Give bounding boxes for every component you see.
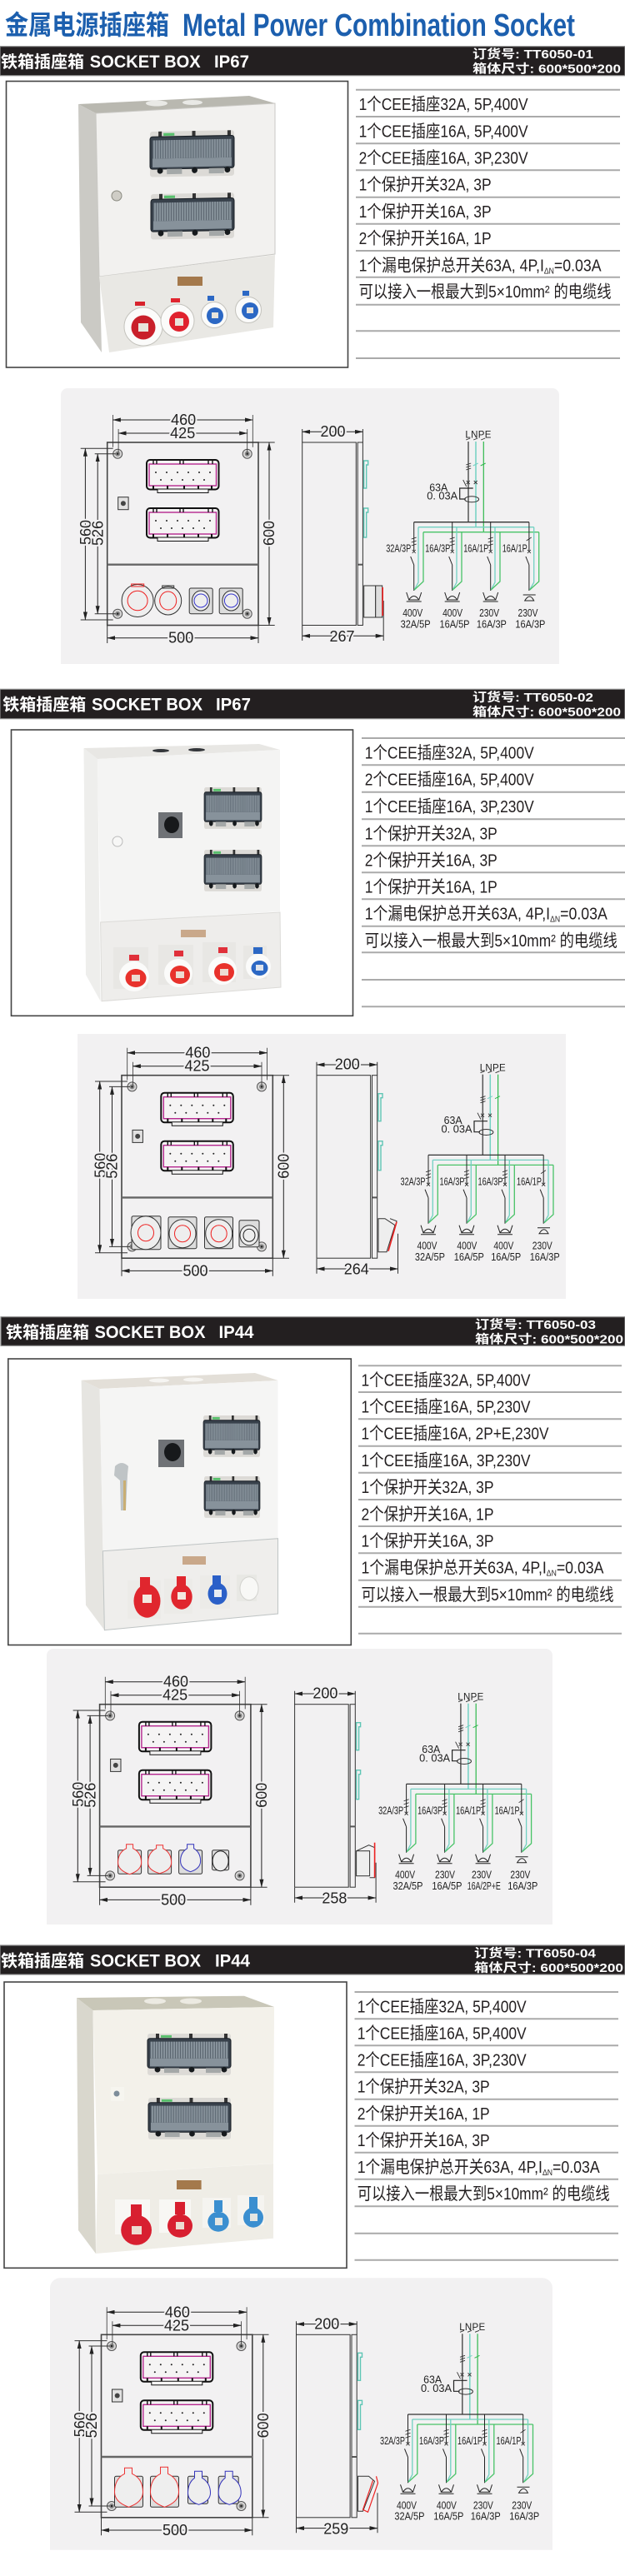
chart: section 2 dimension and wiring drawing: 16A/3P [530,1251,560,1263]
chart: section 4 dimension and wiring drawing: 16A/1P [497,2434,522,2447]
panel: section 1 specification list: 1个保护开关16A, 3P [359,202,492,222]
chart: section 1 dimension and wiring drawing: 16A/5P [439,617,469,630]
chart: section 1 dimension and wiring drawing: 16A/1P [463,542,488,555]
title: 金属电源插座箱 [5,10,169,40]
chart: section 2 dimension and wiring drawing: 230V [532,1240,552,1252]
chart: section 4 dimension and wiring drawing: 0. 03A [421,2382,452,2394]
chart: section 1 dimension and wiring drawing: 267 [329,628,355,645]
chart: section 4 dimension and wiring drawing: 500 [162,2522,188,2539]
panel: section 4 header bar: IP44 [215,1951,250,1970]
panel: section 4 specification list: 1个漏电保护总开关63A, 4P,I [358,2158,572,2177]
panel: section 2 product photo [12,730,353,1016]
panel: section 4 specification list: 2个保护开关16A, 1P [358,2104,490,2124]
chart: section 1 dimension and wiring drawing: 230V [518,607,538,619]
panel: section 4 specification list: 2个CEE插座16A, 3P,230V [358,2051,527,2070]
chart: section 3 dimension and wiring drawing: 400V [395,1869,415,1881]
chart: section 1 dimension and wiring drawing: 0. 03A [427,490,458,502]
panel: section 2 specification list: =0.03A [560,905,608,924]
chart: section 2 dimension and wiring drawing: 200 [335,1056,360,1073]
chart: section 2 dimension and wiring drawing: 16A/5P [491,1251,521,1263]
chart: section 1 dimension and wiring drawing: 460 [171,412,196,428]
chart: section 3 dimension and wiring drawing: 258 [322,1890,347,1907]
panel: section 2 specification list: 2个CEE插座16A, 5P,400V [365,771,534,790]
chart: section 1 dimension and wiring drawing: 400V [402,607,422,619]
panel: section 2 header bar: 铁箱插座箱 [2,695,86,715]
panel: section 1 drawing background [61,388,559,664]
chart: section 4 dimension and wiring drawing: 526 [83,2413,100,2438]
panel: section 4 specification list: 1个保护开关32A, 3P [358,2078,490,2097]
chart: section 3 dimension and wiring drawing: 16A/1P [495,1804,520,1816]
chart: section 4 dimension and wiring drawing: 400V [437,2499,457,2511]
panel: section 3 specification list: 2个保护开关16A, 1P [362,1505,493,1524]
panel: section 4 header bar [0,1945,625,1975]
chart: section 4 dimension and wiring drawing: 600 [255,2413,272,2438]
chart: section 3 dimension and wiring drawing: 16A/3P [508,1880,538,1892]
chart: section 2 dimension and wiring drawing: 264 [344,1261,369,1278]
chart: section 3 dimension and wiring drawing: 600 [253,1783,270,1808]
chart: section 1 dimension and wiring drawing: 526 [89,521,106,546]
panel: section 3 specification list: ΔN [547,1570,557,1579]
panel: section 4 specification list: 1个保护开关16A, 3P [358,2131,490,2150]
chart: section 1 dimension and wiring drawing: 32A/3P [386,542,411,555]
panel: section 1 specification list: 1个CEE插座32A, 5P,400V [359,95,528,114]
chart: section 1 dimension and wiring drawing [78,412,545,646]
chart: section 4 dimension and wiring drawing: 16A/1P [458,2434,482,2447]
panel: section 1 specification list: ΔN [544,267,554,276]
chart: section 3 dimension and wiring drawing: 16A/1P [456,1804,481,1816]
chart: section 3 dimension and wiring drawing [70,1674,538,1908]
panel: section 4 specification list [355,1992,618,2260]
panel: section 3 header bar: 铁箱插座箱 [6,1322,89,1342]
panel: section 4 specification list: 1个CEE插座16A, 5P,400V [358,2024,527,2044]
panel: section 1 header bar: SOCKET BOX [90,52,201,72]
panel: section 3 specification list: 1个CEE插座16A, 3P,230V [362,1451,531,1470]
panel: section 2 specification list: 1个CEE插座16A, 3P,230V [365,797,534,816]
chart: section 2 dimension and wiring drawing: 500 [182,1262,208,1279]
chart: section 4 dimension and wiring drawing: 230V [473,2499,493,2511]
chart: section 1 dimension and wiring drawing: 400V [442,607,462,619]
chart: section 3 dimension and wiring drawing: 560 [70,1782,87,1807]
panel: section 3 header bar [1,1317,625,1346]
panel: section 1 header bar: IP67 [214,52,249,72]
panel: section 3 specification list [358,1365,622,1634]
chart: section 3 dimension and wiring drawing: 63A [422,1743,441,1755]
panel: section 1 specification list: 2个保护开关16A, 1P [359,229,492,248]
panel: section 2 specification list: 1个CEE插座32A, 5P,400V [365,743,534,762]
chart: section 4 dimension and wiring drawing: 200 [314,2315,339,2332]
chart: section 2 dimension and wiring drawing: 16A/5P [454,1251,484,1263]
chart: section 3 dimension and wiring drawing: 16A/5P [432,1880,462,1892]
panel: section 2 specification list [362,738,625,1006]
chart: section 4 dimension and wiring drawing: 230V [512,2499,532,2511]
chart: section 4 dimension and wiring drawing [72,2304,539,2539]
panel: section 2 specification list: ΔN [550,916,560,925]
panel: section 1 specification list: 1个保护开关32A, 3P [359,176,492,195]
panel: section 1 specification list [356,90,620,358]
chart: section 1 dimension and wiring drawing: 200 [320,423,346,440]
title [5,8,575,43]
chart: section 1 dimension and wiring drawing: 63A [429,481,448,493]
chart: section 3 dimension and wiring drawing: 200 [312,1685,338,1702]
chart: section 2 dimension and wiring drawing: 526 [104,1154,121,1179]
panel: section 3 header bar: 箱体尺寸: 600*500*200 [475,1331,623,1346]
chart: section 2 dimension and wiring drawing: 560 [92,1153,108,1178]
panel: section 2 specification list: 1个保护开关32A, 3P [365,825,498,844]
chart: section 1 dimension and wiring drawing: 500 [168,630,193,646]
chart: section 2 dimension and wiring drawing: 460 [185,1045,210,1061]
chart: section 2 dimension and wiring drawing: 0. 03A [442,1122,472,1135]
panel: section 3 specification list: 1个保护开关32A, 3P [362,1478,493,1497]
chart: section 2 dimension and wiring drawing: 32A/5P [415,1251,445,1263]
panel: section 4 specification list: ΔN [542,2169,552,2178]
panel: section 2 drawing background [78,1034,566,1299]
chart: section 2 dimension and wiring drawing: 32A/3P [400,1175,425,1187]
panel: section 4 product photo [4,1982,347,2268]
panel: section 4 header bar: SOCKET BOX [90,1951,201,1970]
panel: section 4 header bar: 订货号: TT6050-04 [474,1946,596,1961]
chart: section 1 dimension and wiring drawing: 16A/3P [425,542,450,555]
panel: section 1 header bar: 订货号: TT6050-01 [472,47,593,62]
chart: section 1 dimension and wiring drawing: 230V [479,607,499,619]
chart: section 3 dimension and wiring drawing: 425 [162,1687,188,1704]
panel: section 1 header bar [0,47,625,77]
chart: section 4 dimension and wiring drawing: 400V [397,2499,417,2511]
panel: section 3 specification list: 1个CEE插座16A, 2P+E,230V [362,1425,549,1444]
panel: section 2 header bar: SOCKET BOX [92,696,202,715]
chart: section 4 dimension and wiring drawing: 460 [165,2304,190,2320]
chart: section 2 dimension and wiring drawing [92,1045,560,1279]
chart: section 4 dimension and wiring drawing: 16A/5P [433,2510,463,2523]
chart: section 4 dimension and wiring drawing: 32A/3P [380,2434,405,2447]
chart: section 3 dimension and wiring drawing: LNPE [458,1692,484,1702]
panel: section 3 header bar: SOCKET BOX [95,1323,205,1342]
chart: section 3 dimension and wiring drawing: 32A/5P [392,1880,422,1892]
chart: section 1 dimension and wiring drawing: 600 [261,521,278,546]
panel: section 3 product photo [8,1359,351,1645]
panel: section 4 header bar: 箱体尺寸: 600*500*200 [474,1960,623,1975]
chart: section 4 dimension and wiring drawing: 16A/3P [419,2434,444,2447]
chart: section 1 dimension and wiring drawing: 16A/1P [502,542,528,555]
chart: section 3 dimension and wiring drawing: 16A/3P [418,1804,442,1816]
chart: section 2 dimension and wiring drawing: 400V [493,1240,514,1252]
chart: section 3 dimension and wiring drawing: 460 [163,1674,188,1690]
chart: section 1 dimension and wiring drawing: LNPE [465,431,492,441]
panel: section 2 header bar: 箱体尺寸: 600*500*200 [472,705,621,720]
chart: section 4 dimension and wiring drawing: 63A [423,2374,442,2386]
chart: section 3 dimension and wiring drawing: 0. 03A [419,1751,450,1764]
chart: section 1 dimension and wiring drawing: 16A/3P [477,617,507,630]
panel: section 4 specification list: =0.03A [552,2158,600,2177]
panel: section 1 product photo [7,82,348,367]
chart: section 4 dimension and wiring drawing: 259 [323,2520,348,2537]
chart: section 3 dimension and wiring drawing: 16A/2P+E [468,1880,501,1892]
panel: section 4 header bar: 铁箱插座箱 [1,1950,84,1970]
chart: section 4 dimension and wiring drawing: 560 [72,2412,88,2437]
chart: section 2 dimension and wiring drawing: 425 [184,1058,210,1075]
chart: section 3 dimension and wiring drawing: 526 [82,1783,98,1808]
chart: section 4 dimension and wiring drawing: 16A/3P [509,2510,539,2523]
panel: section 2 header bar [0,689,625,720]
panel: section 3 specification list: 1个漏电保护总开关63A, 4P,I [362,1559,576,1578]
chart: section 2 dimension and wiring drawing: 16A/3P [440,1175,465,1187]
panel: section 2 specification list: 1个保护开关16A, 1P [365,878,498,897]
chart: section 3 dimension and wiring drawing: 500 [161,1891,186,1908]
chart: section 2 dimension and wiring drawing: 16A/3P [478,1175,503,1187]
chart: section 1 dimension and wiring drawing: 32A/5P [401,617,431,630]
chart: section 2 dimension and wiring drawing: 400V [457,1240,478,1252]
chart: section 2 dimension and wiring drawing: LNPE [480,1063,506,1073]
chart: section 3 dimension and wiring drawing: 230V [472,1869,492,1881]
panel: section 1 specification list: 1个CEE插座16A, 5P,400V [359,122,528,141]
chart: section 1 dimension and wiring drawing: 560 [78,520,94,545]
chart: section 1 dimension and wiring drawing: 425 [170,425,195,442]
chart: section 1 dimension and wiring drawing: 16A/3P [515,617,545,630]
panel: section 2 specification list: 2个保护开关16A, 3P [365,851,498,871]
panel: section 3 specification list: 1个保护开关16A, 3P [362,1531,493,1550]
chart: section 4 dimension and wiring drawing: LNPE [459,2323,486,2333]
chart: section 2 dimension and wiring drawing: 400V [417,1240,438,1252]
chart: section 4 dimension and wiring drawing: 16A/3P [471,2510,501,2523]
panel: section 1 header bar: 箱体尺寸: 600*500*200 [472,62,621,77]
panel: section 3 header bar: 订货号: TT6050-03 [475,1317,596,1332]
panel: section 3 specification list: 1个CEE插座32A, 5P,400V [362,1371,531,1390]
chart: section 4 dimension and wiring drawing: 32A/5P [394,2510,424,2523]
chart: section 2 dimension and wiring drawing: 63A [444,1114,462,1126]
panel: section 3 header bar: IP44 [218,1323,254,1342]
panel: section 1 specification list: =0.03A [554,256,602,275]
chart: section 3 dimension and wiring drawing: 32A/3P [378,1804,403,1816]
chart: section 3 dimension and wiring drawing: 230V [435,1869,455,1881]
panel: section 2 header bar: IP67 [216,696,251,715]
panel: section 2 header bar: 订货号: TT6050-02 [472,690,593,705]
panel: section 1 specification list: 1个漏电保护总开关63A, 4P,I [359,256,573,275]
panel: section 3 specification list: 1个CEE插座16A, 5P,230V [362,1397,531,1416]
panel: section 4 specification list: 1个CEE插座32A, 5P,400V [358,1997,527,2016]
chart: section 3 dimension and wiring drawing: 230V [510,1869,531,1881]
panel: section 3 drawing background [47,1649,552,1925]
panel: section 1 header bar: 铁箱插座箱 [1,52,84,72]
panel: section 1 specification list: 2个CEE插座16A, 3P,230V [359,149,528,168]
panel: section 4 drawing background [50,2278,552,2550]
chart: section 2 dimension and wiring drawing: 16A/1P [517,1175,542,1187]
panel: section 2 specification list: 1个漏电保护总开关63A, 4P,I [365,905,579,924]
panel: section 3 specification list: =0.03A [557,1559,604,1578]
chart: section 4 dimension and wiring drawing: 425 [164,2317,189,2334]
chart: section 2 dimension and wiring drawing: 600 [275,1154,292,1179]
